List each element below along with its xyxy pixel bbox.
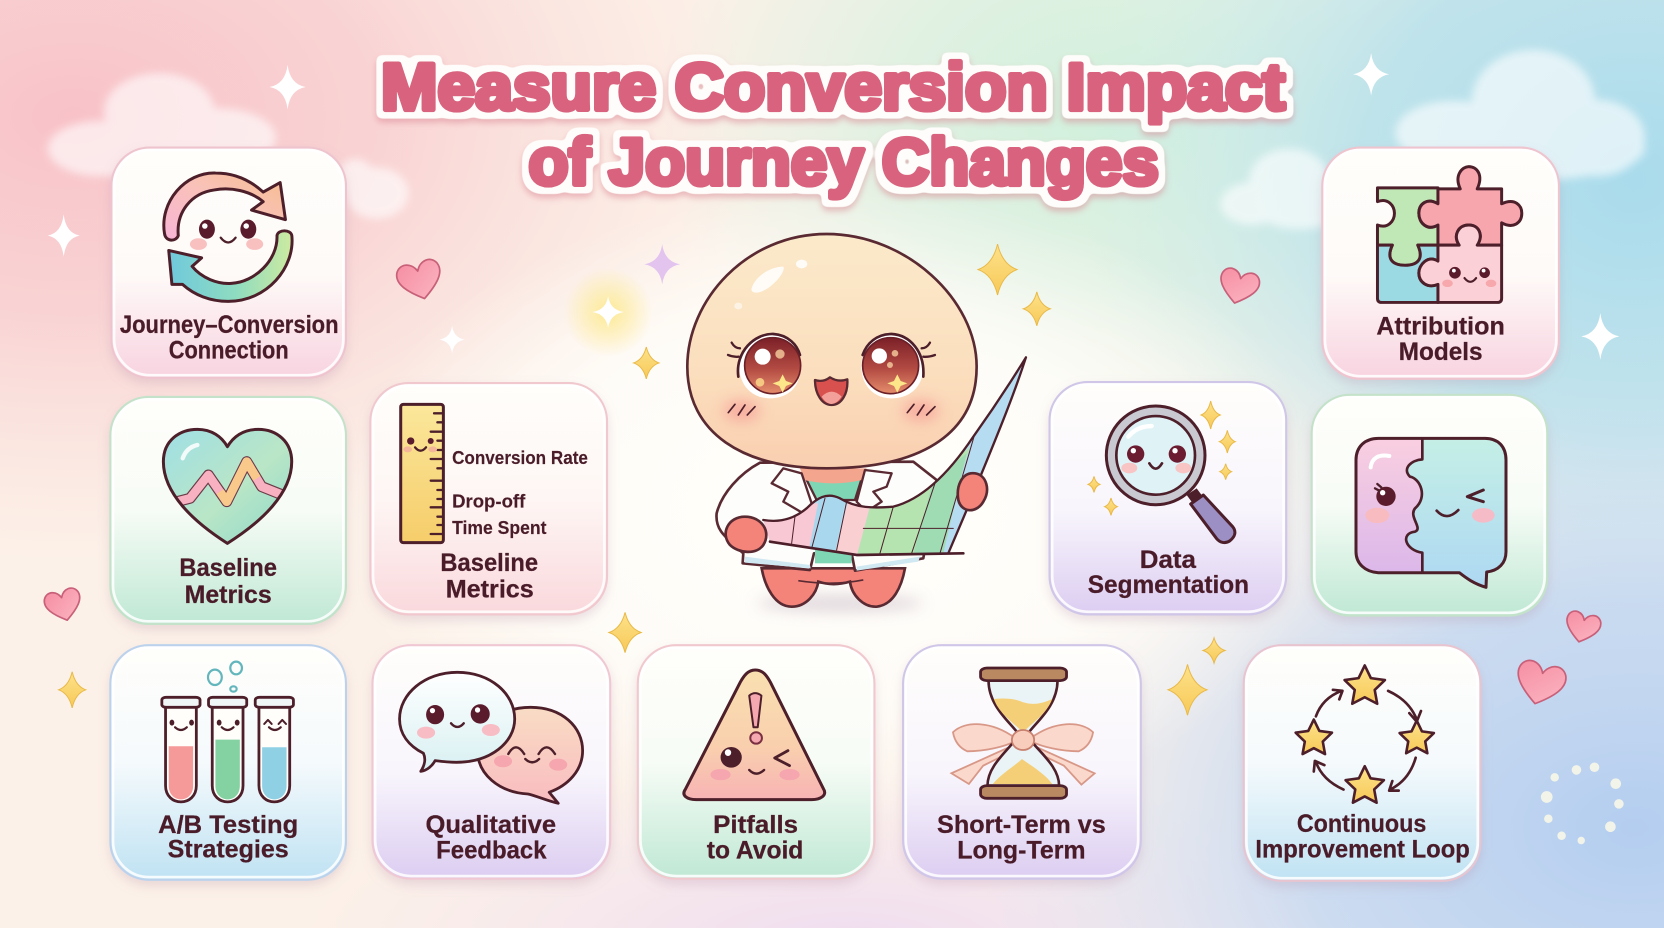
panel: data segmentation (1050, 382, 1286, 614)
right eye (861, 334, 935, 398)
label: Continuous (1297, 810, 1426, 838)
metric list: Drop-off (452, 490, 526, 511)
label: Segmentation (1088, 571, 1249, 599)
blush (723, 401, 939, 420)
icon: warning triangle (684, 670, 825, 800)
label (937, 811, 1106, 865)
panel: continuous improvement loop (1244, 645, 1480, 881)
icon: stars in a loop (1296, 665, 1434, 803)
label (707, 811, 803, 865)
icon: magnifying glass (1088, 401, 1235, 543)
label: to Avoid (707, 837, 803, 865)
label (1376, 312, 1505, 366)
panel: short-term vs long-term (903, 645, 1141, 879)
label: Metrics (185, 581, 272, 609)
label: Data (1140, 546, 1197, 574)
folded line chart (762, 356, 1028, 556)
label: Long-Term (957, 837, 1086, 865)
left eye (728, 334, 801, 398)
icon: hourglass with ribbon (951, 668, 1095, 798)
metric list: Time Spent (452, 517, 547, 538)
label (179, 554, 277, 609)
label: Pitfalls (713, 811, 798, 839)
hearts (42, 257, 1603, 709)
icon: two speech bubbles (400, 672, 583, 803)
label (440, 549, 538, 603)
title: of Journey Changes (528, 125, 1159, 199)
panel: baseline metrics ruler (370, 383, 607, 614)
title (381, 49, 1285, 199)
panel: journey-conversion connection (111, 148, 346, 378)
label (1088, 546, 1249, 599)
ground shadow (757, 595, 923, 612)
label (1255, 810, 1470, 863)
icon: heart with line chart (163, 429, 292, 543)
label (158, 811, 298, 863)
label: Journey–Conversion (120, 311, 339, 339)
label: A/B Testing (158, 811, 298, 839)
panel: A/B testing strategies (110, 645, 346, 880)
central character: scientist mascot holding chart (687, 234, 1037, 612)
label (426, 811, 556, 865)
metric list (452, 447, 588, 538)
icon: two-piece speech bubble (1356, 438, 1506, 587)
dotted ring (1541, 762, 1624, 844)
label: Models (1399, 338, 1483, 366)
icon: test tubes (162, 662, 293, 802)
label: Strategies (168, 835, 289, 863)
panel: pitfalls to avoid (638, 645, 874, 879)
label: Feedback (436, 837, 547, 865)
label: Attribution (1376, 312, 1505, 340)
label: Improvement Loop (1255, 835, 1470, 863)
icon: ruler with face (401, 404, 443, 543)
clouds (48, 50, 1645, 229)
hands (726, 473, 987, 552)
label: Connection (169, 337, 289, 365)
metric list: Conversion Rate (452, 447, 588, 468)
label: Short-Term vs (937, 811, 1106, 839)
label (120, 311, 339, 365)
label: Baseline (179, 554, 277, 582)
mouth (815, 377, 847, 405)
label: Qualitative (426, 811, 556, 839)
title: Measure Conversion Impact (381, 49, 1285, 123)
icon: jigsaw puzzle (1377, 167, 1522, 302)
lab coat (716, 462, 937, 571)
panel: baseline metrics heart (110, 397, 346, 624)
panel: attribution models (1322, 148, 1559, 379)
head (687, 234, 977, 468)
legs and body (762, 568, 905, 607)
sparkles (48, 53, 1619, 715)
panel: qualitative feedback (372, 645, 610, 879)
label: Baseline (440, 549, 538, 577)
icon: cycle arrows with face (164, 173, 292, 301)
panel: speech bubble puzzle (unlabelled) (1312, 395, 1547, 616)
label: Metrics (446, 575, 534, 603)
